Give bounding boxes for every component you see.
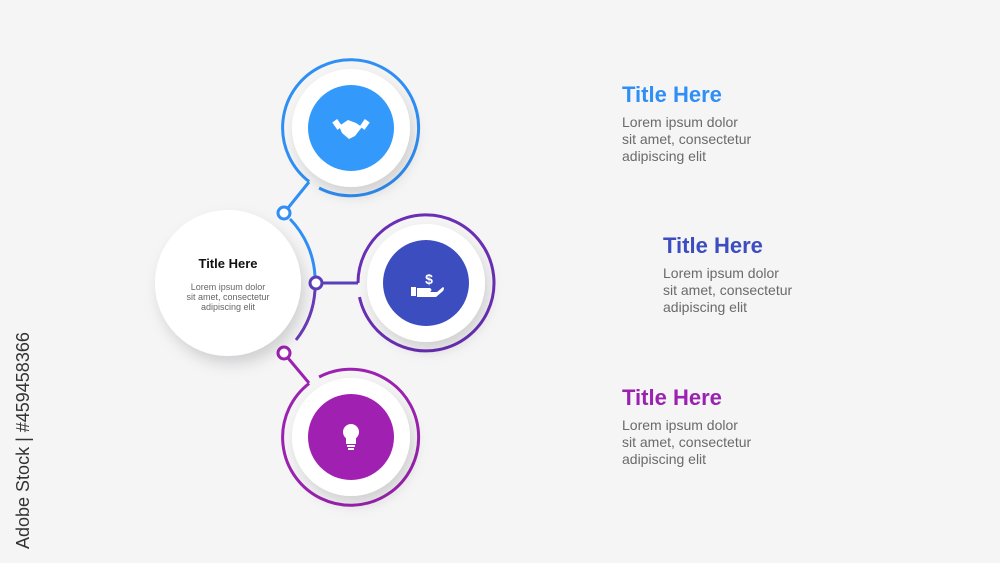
icon: handshake [332,119,370,139]
text block 3 [622,385,751,467]
node 2: money hand [358,215,494,351]
side stock id: Adobe Stock | #459458366 [13,332,33,549]
text block 3: adipiscing elit [622,451,706,467]
text block 2: Lorem ipsum dolor [663,265,779,281]
text block 3: Title Here [622,385,722,410]
text block 1: Lorem ipsum dolor [622,114,738,130]
text block 3: sit amet, consectetur [622,434,751,450]
icon: hand with dollar: $ [425,271,433,287]
text block 2: Title Here [663,233,763,258]
text block 1: adipiscing elit [622,148,706,164]
node 3: lightbulb [283,369,419,505]
icon: lightbulb [343,424,359,450]
central circle: Lorem ipsum dolor [191,282,265,292]
text block 1: sit amet, consectetur [622,131,751,147]
text block 2: adipiscing elit [663,299,747,315]
central circle: adipiscing elit [201,302,256,312]
central circle: Title Here [198,256,258,271]
text block 1: Title Here [622,82,722,107]
connector arcs [278,182,358,383]
text block 2: sit amet, consectetur [663,282,792,298]
text block 3: Lorem ipsum dolor [622,417,738,433]
central circle [155,210,301,356]
node 1: handshake [283,60,419,196]
central circle: sit amet, consectetur [186,292,270,302]
text block 2 [663,233,792,315]
text block 1 [622,82,751,164]
